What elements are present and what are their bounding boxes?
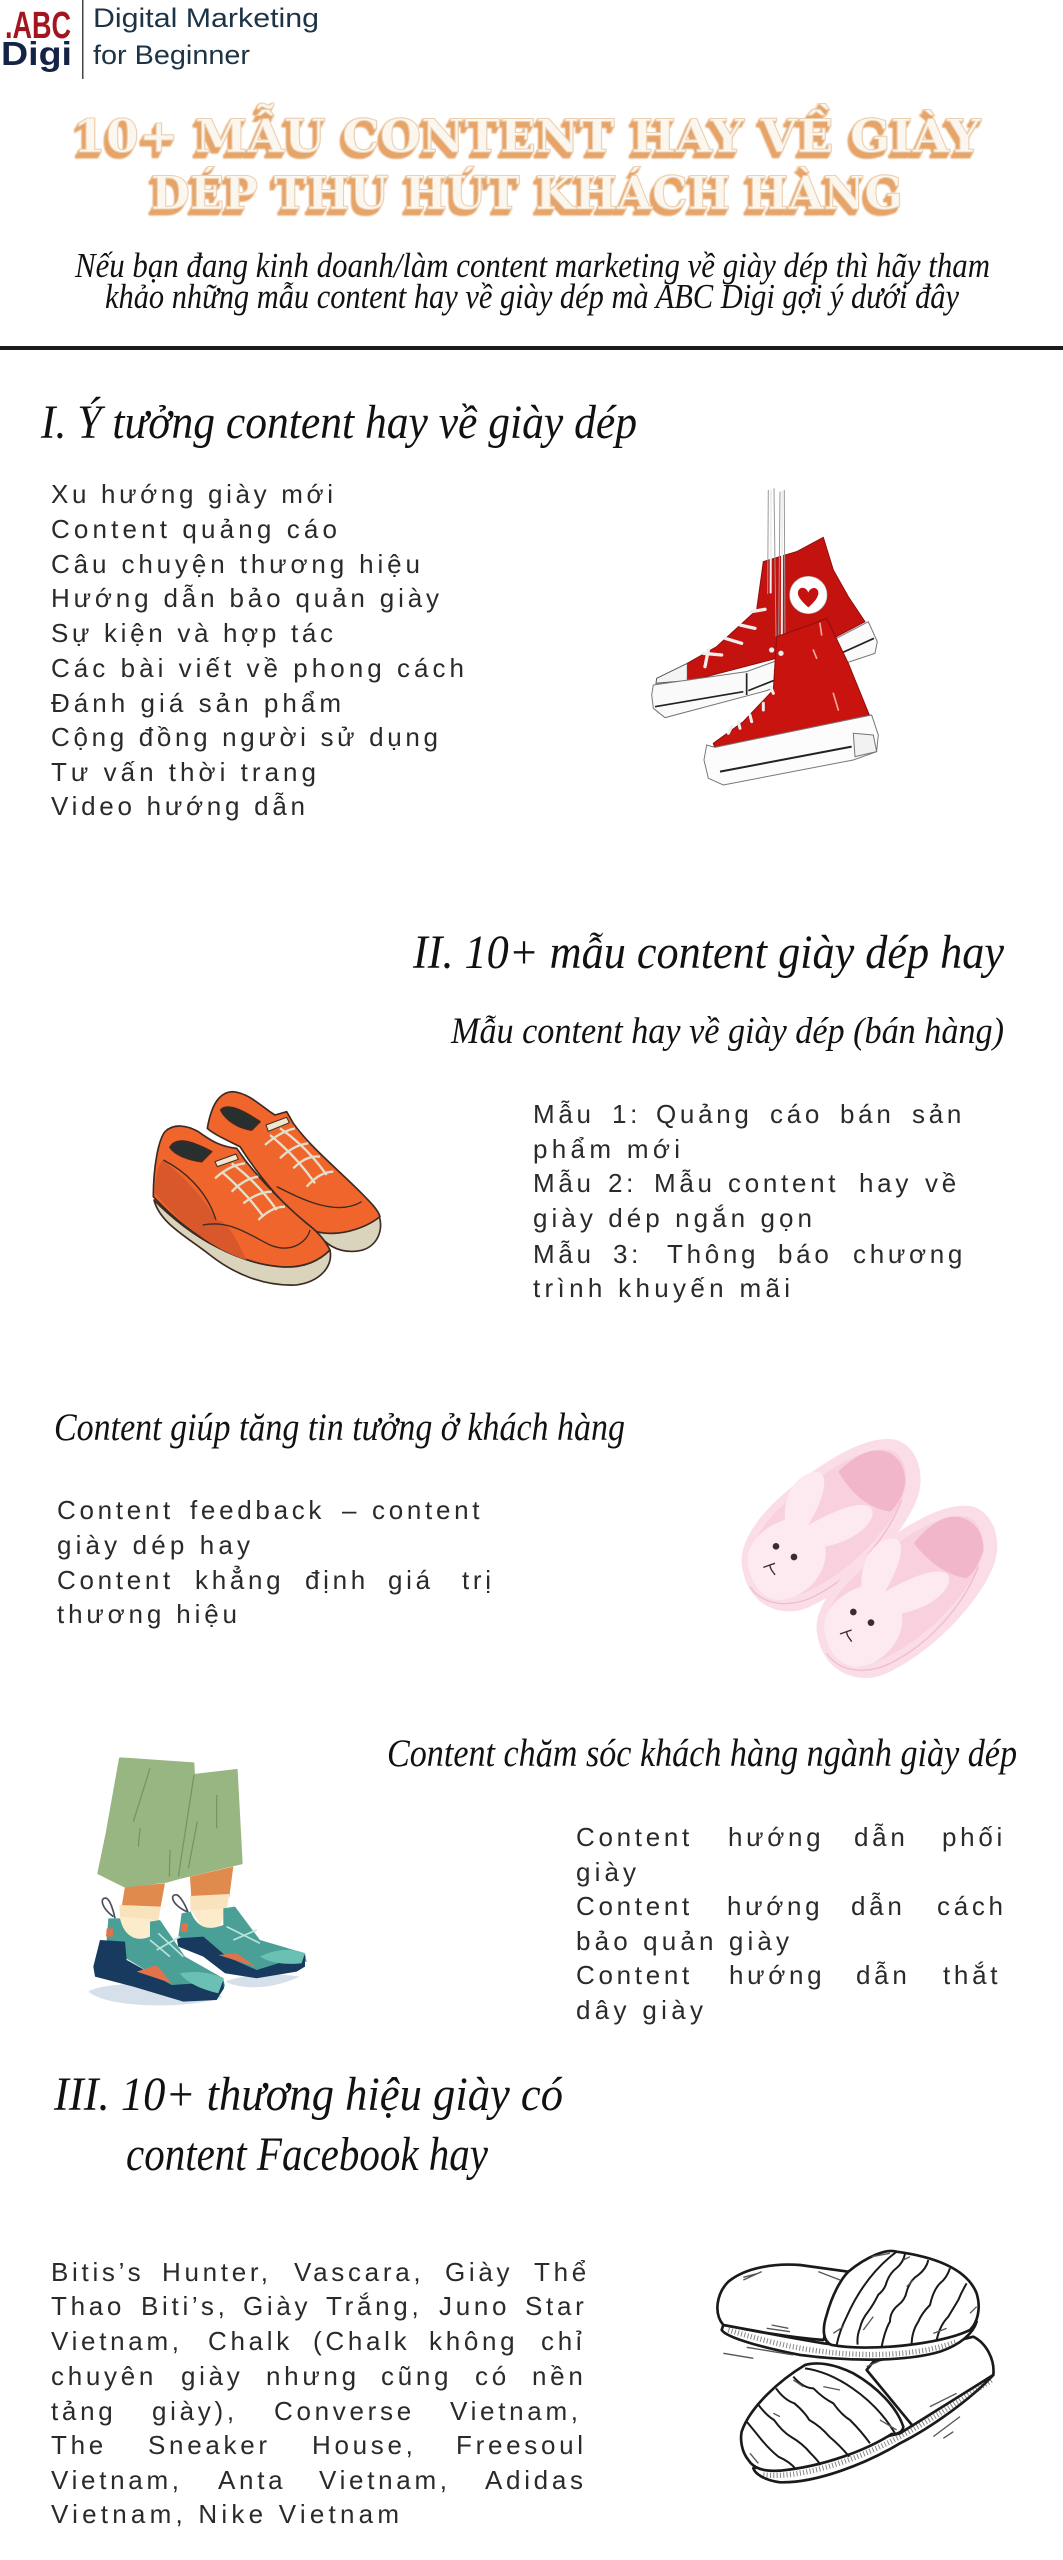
list: brands: Vietnam, Nike Vietnam (51, 2499, 399, 2529)
list: customer care content: Content (576, 1960, 693, 1990)
list: content ideas: Hướng dẫn bảo quản giày (51, 583, 439, 613)
logo: ABC Digi: Digi (1, 35, 72, 72)
list: brands: Vietnam, (450, 2396, 582, 2426)
list: sales templates: Mẫu (654, 1168, 716, 1198)
icon: legs in green trousers and teal sneakers (88, 1758, 307, 2005)
icon: orange shoes (153, 1092, 381, 1285)
list: brands: Giày (445, 2257, 513, 2287)
list: sales templates: bán (840, 1099, 894, 1129)
list: sales templates: cáo (770, 1099, 823, 1129)
list: customer care content: dẫn (851, 1891, 905, 1921)
list: brands: Vascara, (294, 2257, 424, 2287)
list: sales templates: Mẫu (533, 1168, 595, 1198)
list: brands: chuyên (51, 2361, 157, 2391)
list: sales templates: 2: (608, 1168, 637, 1198)
list: brands: có (475, 2361, 510, 2391)
subtitle: khảo những mẫu content hay về giày dép mà ABC Digi gợi ý dưới đây (105, 277, 959, 316)
list: brands: Giày (243, 2291, 311, 2321)
list: brands: Converse (274, 2396, 415, 2426)
icon: pink rabbit slippers (742, 1439, 997, 1678)
logo: ABC Digi: Digital Marketing (93, 3, 319, 33)
list: brands: Anta (218, 2465, 286, 2495)
list: content ideas: Câu chuyện thương hiệu (51, 549, 420, 579)
title: 10+ MẪU CONTENT HAY VỀ GIÀY (73, 102, 982, 163)
logo: ABC Digi: .ABC (5, 5, 71, 47)
subheading: trust content: Content giúp tăng tin tưởng ở khách hàng (54, 1406, 625, 1449)
list: content ideas (51, 479, 464, 821)
list: trust content (57, 1495, 495, 1629)
list: customer care content (576, 1822, 1007, 2025)
list: brands: Vietnam, (51, 2326, 183, 2356)
list: brands: chỉ (541, 2326, 585, 2356)
title (73, 102, 982, 220)
list: customer care content: dẫn (856, 1960, 910, 1990)
list: sales templates (533, 1099, 966, 1303)
list: brands: The (51, 2430, 107, 2460)
list: customer care content: phối (942, 1822, 1006, 1852)
list: brands: Thao (51, 2291, 125, 2321)
list: brands: Vietnam, (51, 2465, 183, 2495)
heading: section III (53, 2068, 563, 2181)
heading: section III: content Facebook hay (126, 2128, 489, 2181)
list: customer care content: Content (576, 1822, 693, 1852)
list: content ideas: Sự kiện và hợp tác (51, 618, 333, 648)
list: customer care content: giày (576, 1857, 636, 1887)
list: brands: Hunter, (162, 2257, 272, 2287)
heading: section III: III. 10+ thương hiệu giày có (53, 2068, 563, 2121)
list: brands: nhưng (266, 2361, 360, 2391)
heading: section II: II. 10+ mẫu content giày dép hay (412, 926, 1005, 979)
logo: ABC Digi: for Beginner (93, 40, 250, 70)
heading: section I: I. Ý tưởng content hay về giày dép (40, 396, 637, 449)
list: brands: Juno (439, 2291, 510, 2321)
list: sales templates: chương (853, 1239, 966, 1269)
list: customer care content: cách (937, 1891, 1007, 1921)
list: brands: Sneaker (148, 2430, 271, 2460)
list: trust content: trị (462, 1565, 495, 1595)
list: customer care content: thắt (943, 1960, 1001, 1990)
list: brands: Bitis’s (51, 2257, 144, 2287)
list: content ideas: Video hướng dẫn (51, 791, 305, 821)
list: brands: Adidas (485, 2465, 587, 2495)
list: sales templates: trình khuyến mãi (533, 1273, 790, 1303)
list: customer care content: Content (576, 1891, 693, 1921)
list: brands: Biti’s, (141, 2291, 229, 2321)
list: content ideas: Cộng đồng người sử dụng (51, 722, 438, 752)
list: brands: cũng (381, 2361, 452, 2391)
list: content ideas: Xu hướng giày mới (51, 479, 333, 509)
list: brands: Thể (534, 2257, 590, 2287)
list: brands: không (429, 2326, 518, 2356)
list: content ideas: Đánh giá sản phẩm (51, 688, 341, 718)
list: brands: tảng (51, 2396, 116, 2426)
list: trust content: thương hiệu (57, 1599, 237, 1629)
list: brands: nền (532, 2361, 586, 2391)
list: brands: Trắng, (326, 2291, 422, 2321)
title: DÉP THU HÚT KHÁCH HÀNG (151, 165, 903, 220)
list: trust content: feedback (190, 1495, 325, 1525)
list: content ideas: Tư vấn thời trang (51, 757, 316, 787)
list: sales templates: Thông (667, 1239, 759, 1269)
list: trust content: giá (388, 1565, 434, 1595)
list: sales templates: hay (859, 1168, 912, 1198)
list: sales templates: 1: (612, 1099, 641, 1129)
list: brands (51, 2257, 590, 2529)
list: trust content: Content (57, 1565, 174, 1595)
list: sales templates: Quảng (656, 1099, 753, 1129)
list: brands: Vietnam, (319, 2465, 451, 2495)
list: sales templates: báo (778, 1239, 832, 1269)
list: customer care content: dây giày (576, 1995, 703, 2025)
icon: black outline slippers (717, 2251, 994, 2482)
icon: red hanging sneakers (652, 488, 878, 785)
list: trust content: khẳng (195, 1564, 284, 1595)
list: customer care content: dẫn (854, 1822, 908, 1852)
list: sales templates: về (925, 1168, 960, 1198)
subtitle (74, 246, 990, 316)
list: content ideas: Content quảng cáo (51, 514, 337, 544)
list: customer care content: hướng (727, 1891, 823, 1921)
list: customer care content: bảo quản giày (576, 1926, 789, 1956)
list: sales templates: phẩm mới (533, 1134, 680, 1164)
list: trust content: content (372, 1495, 483, 1525)
list: sales templates: content (728, 1168, 839, 1198)
list: sales templates: giày dép ngắn gọn (533, 1203, 812, 1233)
list: brands: giày (181, 2361, 244, 2391)
list: customer care content: hướng (729, 1960, 825, 1990)
list: brands: Chalk (208, 2326, 293, 2356)
list: brands: House, (312, 2430, 417, 2460)
list: trust content: – (342, 1495, 360, 1525)
logo: ABC Digi (1, 0, 319, 79)
list: customer care content: hướng (728, 1822, 824, 1852)
list: brands: (Chalk (313, 2326, 410, 2356)
list: brands: Star (525, 2291, 587, 2321)
list: sales templates: Mẫu (533, 1099, 595, 1129)
list: trust content: định (305, 1565, 369, 1595)
list: sales templates: Mẫu (533, 1239, 595, 1269)
list: sales templates: sản (912, 1099, 965, 1129)
subheading: sales content: Mẫu content hay về giày dép (bán hàng) (450, 1011, 1004, 1052)
list: brands: Freesoul (456, 2430, 587, 2460)
list: trust content: Content (57, 1495, 174, 1525)
list: brands: giày), (152, 2396, 238, 2426)
list: content ideas: Các bài viết về phong cách (51, 653, 464, 683)
list: trust content: giày dép hay (57, 1530, 250, 1560)
list: sales templates: 3: (613, 1239, 642, 1269)
